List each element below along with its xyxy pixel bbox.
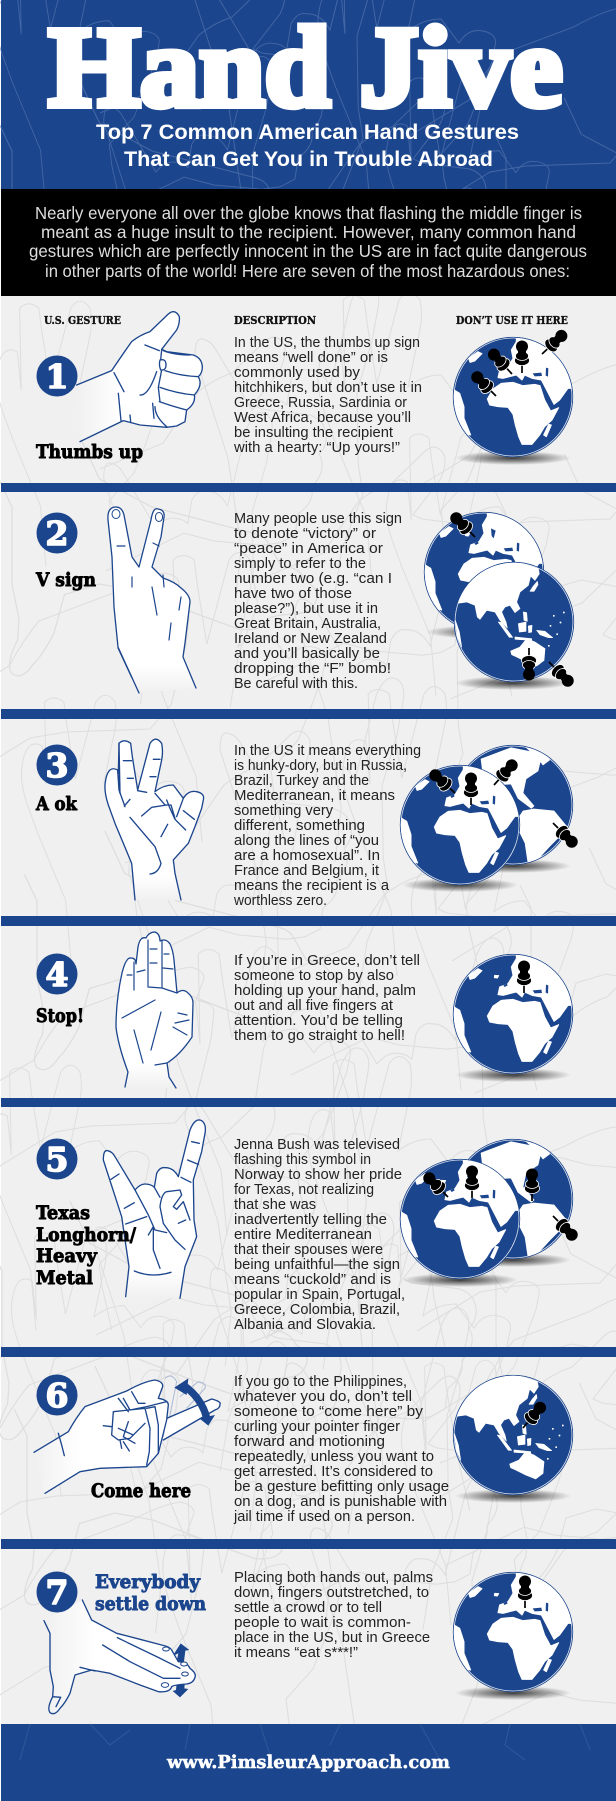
arrow: finger motion	[174, 1378, 215, 1426]
gesture name	[95, 1572, 207, 1615]
description	[233, 742, 421, 909]
description: get arrested. It’s considered to	[234, 1463, 433, 1480]
icon: come here hand	[34, 1376, 220, 1493]
column headings	[44, 314, 568, 327]
description: Greece, Colombia, Brazil,	[234, 1301, 400, 1318]
arrow: up and down motion	[173, 1643, 189, 1697]
description: whatever you do, don’t tell	[233, 1388, 412, 1405]
description: holding up your hand, palm	[234, 982, 416, 999]
description: entire Mediterranean	[234, 1226, 372, 1243]
column headings: U.S. GESTURE	[44, 314, 121, 327]
description: something very	[234, 802, 333, 819]
number badge 5	[36, 1138, 78, 1180]
globe with pin	[451, 954, 573, 1082]
description: Ireland or New Zealand	[234, 630, 387, 647]
description: along the lines of “you	[234, 832, 379, 849]
description: Norway to show her pride	[234, 1166, 402, 1183]
description: people to wait is common-	[234, 1614, 411, 1631]
description: dropping the “F” bomb!	[234, 660, 391, 677]
description: Be careful with this.	[234, 675, 358, 692]
description: please?”), but use it in	[234, 600, 378, 617]
description: are a homosexual”. In	[234, 847, 380, 864]
description: and you’ll basically be	[234, 645, 380, 662]
description: popular in Spain, Portugal,	[234, 1286, 405, 1303]
description: “peace” in America or	[234, 540, 383, 557]
description: If you’re in Greece, don’t tell	[234, 952, 420, 969]
description: If you go to the Philippines,	[234, 1373, 407, 1390]
description: for Texas, not realizing	[234, 1181, 374, 1198]
description: to denote “victory” or	[234, 525, 376, 542]
gesture name: Come here	[91, 1481, 191, 1502]
intro text	[29, 203, 587, 281]
icon: V sign hand	[108, 507, 196, 693]
panel: gesture 6 come here	[34, 1373, 573, 1525]
description	[234, 1569, 433, 1661]
column headings: DESCRIPTION	[234, 314, 316, 327]
number badge 7	[36, 1572, 78, 1612]
globes with pins	[398, 745, 581, 892]
description: worthless zero.	[233, 892, 327, 909]
globe with pin	[453, 1373, 573, 1503]
gesture name: Everybody	[95, 1572, 201, 1593]
description: commonly used by	[234, 364, 360, 381]
website address: www.PimsleurApproach.com	[166, 1752, 450, 1773]
description	[234, 952, 420, 1044]
description: Albania and Slovakia.	[234, 1316, 376, 1333]
description: them to go straight to hell!	[234, 1027, 405, 1044]
panel: gesture 5 Texas Longhorn	[36, 1120, 581, 1333]
description: that their spouses were	[234, 1241, 383, 1258]
globe with pin	[451, 1572, 573, 1700]
description: have two of those	[234, 585, 352, 602]
description: place in the US, but in Greece	[234, 1629, 430, 1646]
intro text: meant as a huge insult to the recipient. However, many common hand	[41, 222, 576, 242]
panel: gesture 3 A ok	[35, 739, 581, 909]
gesture name: Thumbs up	[36, 442, 143, 463]
icon: thumbs up hand	[77, 312, 202, 442]
description: In the US it means everything	[234, 742, 421, 759]
description: be insulting the recipient	[234, 424, 394, 441]
number badge 6: 6	[46, 1376, 68, 1415]
description: number two (e.g. “can I	[234, 570, 392, 587]
number badge 4	[36, 954, 78, 994]
number badge 2: 2	[46, 514, 68, 553]
number badge 3: 3	[46, 746, 68, 785]
number badge 4: 4	[46, 955, 68, 994]
column headings: DON’T USE IT HERE	[456, 314, 568, 327]
number badge 1	[36, 356, 78, 396]
description: being unfaithful—the sign	[234, 1256, 400, 1273]
panel: gesture 7 settle down	[36, 1569, 573, 1714]
description: forward and motioning	[234, 1433, 385, 1450]
description: Jenna Bush was televised	[234, 1136, 400, 1153]
icon: longhorn hand	[103, 1120, 205, 1298]
description: curling your pointer finger	[234, 1418, 400, 1435]
divider bands	[1, 483, 616, 1549]
description: means “cuckold” and is	[234, 1271, 391, 1288]
description: someone to stop by also	[234, 967, 394, 984]
description: attention. You’d be telling	[234, 1012, 403, 1029]
description: be a gesture befitting only usage	[234, 1478, 449, 1495]
description: is hunky-dory, but in Russia,	[234, 757, 407, 774]
header banner	[0, 0, 616, 189]
number badge 6	[36, 1374, 78, 1416]
description: on a dog, and is punishable with	[234, 1493, 447, 1510]
footer banner	[1, 1724, 616, 1801]
description: flashing this symbol in	[234, 1151, 371, 1168]
description: jail time if used on a person.	[233, 1508, 415, 1525]
number badge 7: 7	[46, 1573, 68, 1612]
description: hitchhikers, but don’t use it in	[234, 379, 422, 396]
description: inadvertently telling the	[234, 1211, 387, 1228]
intro text: gestures which are perfectly innocent in the US are in fact quite dangerous	[29, 241, 587, 261]
intro panel	[1, 189, 616, 296]
icon: OK hand	[105, 739, 204, 900]
description: Mediterranean, it means	[234, 787, 395, 804]
description: repeatedly, unless you want to	[234, 1448, 434, 1465]
globes with pins	[398, 1139, 581, 1287]
description: down, fingers outstretched, to	[234, 1584, 429, 1601]
title: Hand Jive	[48, 4, 562, 130]
description: someone to “come here” by	[234, 1403, 424, 1420]
description: it means “eat s***!”	[234, 1644, 358, 1661]
icon: stop hand	[116, 932, 193, 1088]
gesture name: A ok	[35, 794, 78, 815]
icon: settle down hands	[44, 1600, 195, 1714]
description: simply to refer to the	[234, 555, 366, 572]
description: Brazil, Turkey and the	[234, 772, 369, 789]
globes with pins	[422, 509, 577, 690]
description: settle a crowd or to tell	[234, 1599, 382, 1616]
description: that she was	[234, 1196, 316, 1213]
gesture name: Longhorn/	[36, 1225, 136, 1246]
description	[233, 334, 422, 456]
number badge 2	[36, 512, 78, 554]
subtitle	[96, 121, 519, 171]
gesture name: Metal	[36, 1268, 93, 1289]
description	[234, 1136, 405, 1333]
gesture name: Texas	[36, 1203, 90, 1224]
description: Great Britain, Australia,	[234, 615, 381, 632]
intro text: in other parts of the world! Here are seven of the most hazardous ones:	[45, 261, 570, 281]
gesture name: Heavy	[36, 1246, 98, 1267]
description: Many people use this sign	[234, 510, 402, 527]
subtitle: Top 7 Common American Hand Gestures	[96, 121, 519, 144]
description: means the recipient is a	[234, 877, 390, 894]
description	[233, 1373, 449, 1525]
panel: gesture 1 thumbs up	[36, 312, 573, 465]
description	[234, 510, 402, 692]
gesture name	[36, 1203, 136, 1289]
description: West Africa, because you’ll	[234, 409, 411, 426]
description: means “well done” or is	[234, 349, 388, 366]
gesture name: V sign	[35, 570, 97, 591]
number badge 5: 5	[46, 1140, 68, 1179]
subtitle: That Can Get You in Trouble Abroad	[124, 148, 493, 171]
description: Placing both hands out, palms	[234, 1569, 433, 1586]
description: different, something	[234, 817, 365, 834]
panel: gesture 4 stop	[36, 932, 573, 1088]
description: with a hearty: “Up yours!”	[233, 439, 400, 456]
description: In the US, the thumbs up sign	[234, 334, 420, 351]
gesture name: settle down	[95, 1594, 207, 1615]
number badge 1: 1	[46, 357, 68, 396]
description: France and Belgium, it	[234, 862, 380, 879]
number badge 3	[36, 744, 78, 786]
description: out and all five fingers at	[234, 997, 394, 1014]
panel: gesture 2 V sign	[35, 507, 577, 693]
description: Greece, Russia, Sardinia or	[234, 394, 407, 411]
gesture name: Stop!	[36, 1006, 84, 1027]
globe with pins	[451, 326, 573, 465]
intro text: Nearly everyone all over the globe knows that flashing the middle finger is	[35, 203, 582, 223]
